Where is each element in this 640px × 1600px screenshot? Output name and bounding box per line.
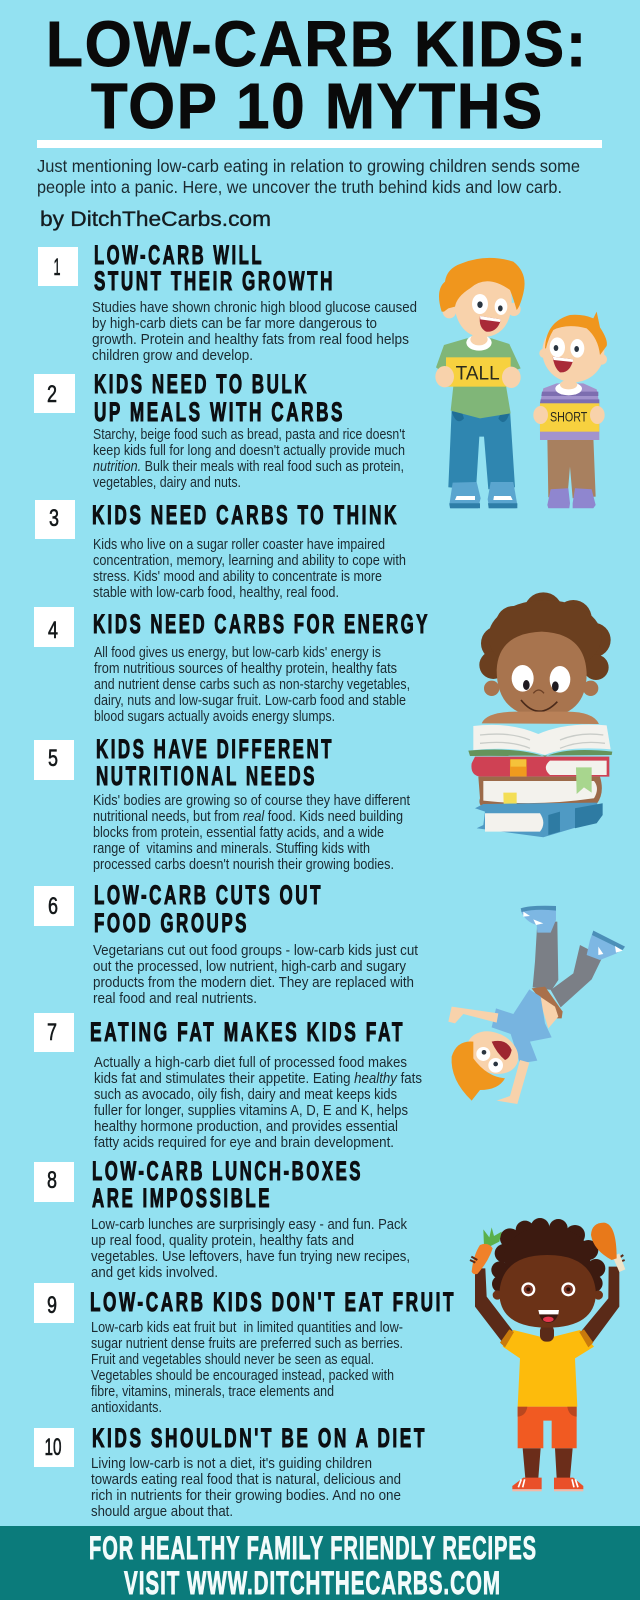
heading 2: UP MEALS WITH CARBS <box>94 397 345 427</box>
body text 4: dairy, nuts and low-sugar fruit. Low-carb food and stable <box>94 693 406 709</box>
heading 10: KIDS SHOULDN'T BE ON A DIET <box>92 1423 427 1453</box>
number badge 8 <box>34 1162 74 1202</box>
number badge 9: 9 <box>47 1292 57 1319</box>
number badge 6 <box>34 886 74 926</box>
body text 4: blood sugars actually avoids energy slumps. <box>94 709 335 725</box>
heading 3: KIDS NEED CARBS TO THINK <box>92 500 399 530</box>
heading 5 <box>96 734 334 791</box>
panel: myth 10 <box>34 1423 427 1520</box>
body text 2: nutrition. Bulk their meals with real food such as protein, <box>93 459 404 475</box>
illustration: tall and short boys: SHORT <box>550 409 588 425</box>
body text 7: healthy hormone production, and provides essential <box>94 1119 398 1135</box>
heading 7: EATING FAT MAKES KIDS FAT <box>90 1017 405 1047</box>
body text 10: rich in nutrients for their growing bodies. And no one <box>91 1488 401 1504</box>
body text 9: Fruit and vegetables should never be seen as equal. <box>91 1352 374 1368</box>
title: LOW-CARB KIDS: <box>46 8 588 80</box>
panel: myth 9 <box>34 1283 456 1416</box>
number badge 2: 2 <box>47 381 57 408</box>
panel: myth 4 <box>34 607 430 725</box>
body text 6: out the processed, low nutrient, high-carb and sugary <box>93 959 407 975</box>
body text 4 <box>94 645 410 725</box>
body text 7: fatty acids required for eye and brain development. <box>94 1135 394 1151</box>
illustration: boy with carrot and drumstick <box>470 1218 625 1491</box>
heading 6: LOW-CARB CUTS OUT <box>94 880 323 910</box>
body text 4: and nutrient dense carbs such as non-starchy vegetables, <box>94 677 410 693</box>
body text 7 <box>94 1055 422 1151</box>
body text 9: Vegetables should be encouraged instead, packed with <box>91 1368 394 1384</box>
body text 6: Vegetarians cut out food groups - low-carb kids just cut <box>93 943 418 959</box>
number badge 10: 10 <box>44 1434 62 1461</box>
panel: myth 6 <box>34 880 418 1007</box>
number badge 5 <box>34 740 74 780</box>
body text 10: towards eating real food that is natural, delicious and <box>91 1472 401 1488</box>
body text 10: Living low-carb is not a diet, it's guiding children <box>91 1456 372 1472</box>
illustration: tall and short boys <box>435 258 607 508</box>
number badge 3 <box>35 500 75 539</box>
heading 5: NUTRITIONAL NEEDS <box>96 761 317 791</box>
illustration: tall and short boys: TALL <box>456 363 500 384</box>
body text 9: sugar nutrient dense fruits are preferred such as berries. <box>91 1336 403 1352</box>
number badge 9 <box>34 1283 74 1323</box>
number badge 1: 1 <box>54 254 60 281</box>
body text 7: fuller for longer, supplies vitamins A, D, E and K, helps <box>94 1103 408 1119</box>
body text 9: Low-carb kids eat fruit but in limited quantities and low- <box>91 1320 403 1336</box>
number badge 7: 7 <box>47 1019 57 1046</box>
byline: by DitchTheCarbs.com <box>40 208 271 231</box>
body text 5: processed carbs doesn't nourish their growing bodies. <box>93 857 394 873</box>
heading 5: KIDS HAVE DIFFERENT <box>96 734 334 764</box>
body text 6 <box>93 943 418 1007</box>
intro text: people into a panic. Here, we uncover the truth behind kids and low carb. <box>37 177 562 197</box>
number badge 7 <box>34 1013 74 1052</box>
body text 3: stable with low-carb food, healthy, real food. <box>93 585 339 601</box>
body text 5: Kids' bodies are growing so of course they have different <box>93 793 410 809</box>
heading 1: STUNT THEIR GROWTH <box>94 266 335 296</box>
number badge 8: 8 <box>47 1167 57 1194</box>
number badge 1 <box>38 247 78 286</box>
heading 8: ARE IMPOSSIBLE <box>92 1183 272 1213</box>
number badge 2 <box>34 374 75 413</box>
body text 10 <box>91 1456 401 1520</box>
body text 7: kids fat and stimulates their appetite. Eating healthy fats <box>94 1071 422 1087</box>
heading 8: LOW-CARB LUNCH-BOXES <box>92 1156 363 1186</box>
body text 2: Starchy, beige food such as bread, pasta and rice doesn't <box>93 427 405 443</box>
body text 8 <box>91 1217 410 1281</box>
body text 9: fibre, vitamins, minerals, trace elements and <box>91 1384 334 1400</box>
panel: myth 2 <box>34 369 405 491</box>
illustration: boy doing a handstand <box>448 906 625 1104</box>
body text 3 <box>93 537 406 601</box>
body text 8: up real food, quality protein, healthy fats and <box>91 1233 354 1249</box>
body text 3: concentration, memory, learning and ability to cope with <box>93 553 406 569</box>
panel: myth 3 <box>35 500 406 601</box>
body text 1: by high-carb diets can be far more dangerous to <box>92 316 377 332</box>
panel: myth 5 <box>34 734 410 873</box>
body text 6: real food and real nutrients. <box>93 991 257 1007</box>
heading 2 <box>94 369 345 427</box>
panel: myth 7 <box>34 1013 422 1151</box>
heading 6 <box>94 880 323 938</box>
heading 8 <box>92 1156 363 1213</box>
number badge 6: 6 <box>48 893 58 920</box>
body text 4: from nutritious sources of healthy protein, healthy fats <box>94 661 397 677</box>
body text 4: All food gives us energy, but low-carb kids' energy is <box>94 645 381 661</box>
intro text: Just mentioning low-carb eating in relation to growing children sends some <box>37 156 580 176</box>
body text 1: growth. Protein and healthy fats from real food helps <box>92 332 409 348</box>
number badge 4: 4 <box>48 617 58 644</box>
heading 4: KIDS NEED CARBS FOR ENERGY <box>93 609 430 639</box>
body text 1 <box>92 300 417 364</box>
panel: myth 8 <box>34 1156 410 1281</box>
body text 9: antioxidants. <box>91 1400 162 1416</box>
number badge 10 <box>34 1428 74 1467</box>
body text 5: range of vitamins and minerals. Stuffing kids with <box>93 841 370 857</box>
number badge 3: 3 <box>49 505 59 532</box>
heading 6: FOOD GROUPS <box>94 908 249 938</box>
body text 5 <box>93 793 410 873</box>
footer banner <box>0 1526 640 1600</box>
title <box>46 8 588 142</box>
body text 3: Kids who live on a sugar roller coaster have impaired <box>93 537 385 553</box>
body text 2: vegetables, dairy and nuts. <box>93 475 241 491</box>
body text 1: Studies have shown chronic high blood glucose caused <box>92 300 417 316</box>
body text 10: should argue about that. <box>91 1504 233 1520</box>
body text 8: vegetables. Use leftovers, have fun trying new recipes, <box>91 1249 410 1265</box>
body text 5: blocks from protein, essential fatty acids, and a wide <box>93 825 384 841</box>
title: TOP 10 MYTHS <box>91 70 544 142</box>
body text 9 <box>91 1320 403 1416</box>
body text 6: products from the modern diet. They are replaced with <box>93 975 414 991</box>
intro text <box>37 156 580 197</box>
heading 2: KIDS NEED TO BULK <box>94 369 309 399</box>
body text 2 <box>93 427 405 491</box>
body text 2: keep kids full for long and doesn't actually provide much <box>93 443 405 459</box>
body text 7: such as avocado, oily fish, dairy and meat keeps kids <box>94 1087 397 1103</box>
body text 8: Low-carb lunches are surprisingly easy - and fun. Pack <box>91 1217 408 1233</box>
body text 8: and get kids involved. <box>91 1265 218 1281</box>
body text 3: stress. Kids' mood and ability to concentrate is more <box>93 569 382 585</box>
panel: myth 1 <box>38 240 417 364</box>
body text 1: children grow and develop. <box>92 348 253 364</box>
body text 7: Actually a high-carb diet full of processed food makes <box>94 1055 407 1071</box>
heading 1: LOW-CARB WILL <box>94 240 264 270</box>
body text 5: nutritional needs, but from real food. Kids need building <box>93 809 403 825</box>
illustration: boy reading on books <box>468 592 612 837</box>
number badge 5: 5 <box>48 745 58 772</box>
heading 1 <box>94 240 335 296</box>
number badge 4 <box>34 607 74 647</box>
